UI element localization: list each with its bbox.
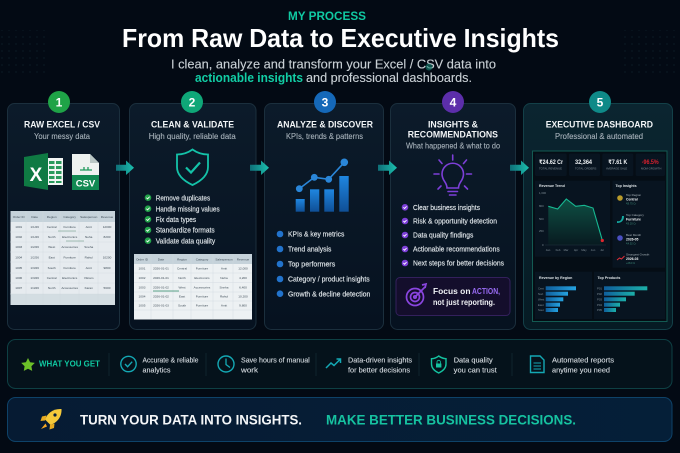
clean data table: North xyxy=(178,276,186,280)
benefit: data-driven xyxy=(326,355,412,375)
benefit: automated reports: anytime you need xyxy=(552,366,610,375)
raw data table: Order ID xyxy=(13,215,25,219)
raw data table: Central xyxy=(47,225,57,229)
badge 4: 4 xyxy=(450,96,457,110)
top insights: ₹8.75 Cr xyxy=(626,202,636,206)
raw data table: 1002 xyxy=(15,235,22,239)
clean data table: 2026-01-01 xyxy=(153,266,169,270)
arrow 1 to 2 xyxy=(116,160,134,175)
raw data table: 1/3/26 xyxy=(30,266,39,270)
raw data table: 1/3/26 xyxy=(30,276,39,280)
raw data table: Neha xyxy=(85,235,93,239)
top insights: ₹4.52 Cr xyxy=(626,242,636,246)
raw data table: 1/1/26 xyxy=(30,225,39,229)
clean data table: 1004 xyxy=(139,294,146,298)
checklist: recommendations: Clear business insights xyxy=(413,203,480,212)
subheading: kpis: KPIs, trends & patterns xyxy=(286,132,363,141)
badge 1 xyxy=(48,91,70,113)
line chart: revenue trend: Jul xyxy=(600,248,604,252)
raw data table: Furniture xyxy=(64,256,76,260)
badge 2 xyxy=(181,91,203,113)
subheading: messy data: Your messy data xyxy=(34,132,90,141)
raw data table: Electronics xyxy=(62,235,78,239)
raw data table: 1/1/26 xyxy=(30,235,39,239)
raw data table: 1/2/26 xyxy=(30,245,39,249)
panel 2: clean & validate xyxy=(130,104,256,330)
kpi cards: TOTAL REVENUE xyxy=(539,166,562,170)
raw data table: 1005 xyxy=(15,266,22,270)
top insights: ₹9.20 Cr xyxy=(626,222,636,226)
checklist: recommendations: Actionable recommendations xyxy=(413,245,500,254)
subtitle: and professional dashboards. xyxy=(306,70,472,85)
raw data table: Amit xyxy=(86,266,92,270)
checklist: cleaning steps: Remove duplicates xyxy=(156,193,210,202)
arrow 4 to 5 xyxy=(510,160,529,175)
benefit: save hours xyxy=(218,355,310,375)
list: analysis outputs: Growth & decline detection xyxy=(288,289,370,298)
bar chart: revenue by region: East xyxy=(538,303,544,307)
checklist: cleaning steps xyxy=(145,193,220,245)
icon: star xyxy=(21,358,35,371)
bar chart: top products: P03 xyxy=(597,298,602,302)
benefit: automated reports xyxy=(530,355,614,375)
line chart: revenue trend: Apr xyxy=(574,248,578,252)
arrow 2 to 3 xyxy=(250,160,269,175)
subtitle xyxy=(171,56,496,85)
list: analysis outputs: Top performers xyxy=(288,260,335,269)
line chart: revenue trend: Feb xyxy=(556,248,561,252)
benefit: save hours: Save hours of manual xyxy=(241,355,310,364)
eyebrow: my process: MY PROCESS xyxy=(288,11,366,23)
heading: insights xyxy=(408,119,498,140)
raw data table: 1003 xyxy=(15,245,22,249)
raw data table: Sneha xyxy=(84,245,93,249)
line chart: revenue trend: May xyxy=(581,248,587,252)
badge 1: 1 xyxy=(56,96,63,110)
clean data table: 6,400 xyxy=(239,286,247,290)
checklist: recommendations: Data quality findings xyxy=(413,231,473,240)
clean data table: 2026-01-03 xyxy=(153,304,169,308)
bar chart: revenue by region xyxy=(535,272,592,319)
top insights: 2026-03 xyxy=(626,257,639,261)
benefit: data-driven: for better decisions xyxy=(348,366,410,375)
raw data table: Salesperson xyxy=(80,215,98,219)
clean data table: Furniture xyxy=(196,266,208,270)
raw data table: 1/4/26 xyxy=(30,286,39,290)
title: From Raw Data to Executive Insights xyxy=(122,23,559,53)
heading: clean: CLEAN & VALIDATE xyxy=(151,120,234,130)
clean data table: Rahul xyxy=(220,294,228,298)
header xyxy=(122,11,559,85)
icon: target xyxy=(406,284,426,306)
benefit: data-driven: Data-driven insights xyxy=(348,355,412,364)
badge 2: 2 xyxy=(189,96,196,110)
badge 5: 5 xyxy=(597,96,604,110)
bar chart: revenue by region: Sout xyxy=(538,308,544,312)
kpi cards xyxy=(535,154,665,176)
callout text: ACTION, xyxy=(472,286,500,296)
heading: analyze: ANALYZE & DISCOVER xyxy=(277,120,373,130)
clean data table: 2026-01-02 xyxy=(153,294,169,298)
raw data table: East xyxy=(49,256,55,260)
panel 3: analyze & discover xyxy=(264,104,384,330)
badge 5 xyxy=(589,91,611,113)
raw data table: Accessories xyxy=(61,286,78,290)
bar chart: top products: P04 xyxy=(597,303,602,307)
callout text: Focus on xyxy=(433,286,470,296)
panel 1: raw excel / csv xyxy=(8,104,120,330)
kpi cards: TOTAL ORDERS xyxy=(575,166,597,170)
arrow 3 to 4 xyxy=(378,160,397,175)
benefit: data quality xyxy=(432,355,497,375)
line chart: revenue trend: 500 xyxy=(539,217,544,221)
raw data table: 8200 xyxy=(104,235,111,239)
line chart: revenue trend: Jun xyxy=(591,248,596,252)
callout text xyxy=(433,286,500,307)
top insights: Top Category xyxy=(626,213,644,217)
kpi cards: ₹24.62 Cr xyxy=(539,159,564,166)
clean data table: South xyxy=(178,304,186,308)
subtitle: actionable insights xyxy=(195,70,303,85)
clean data table xyxy=(134,254,252,320)
icon: csv file xyxy=(72,154,99,190)
raw data table xyxy=(10,211,115,305)
top insights: 2026-05 xyxy=(626,238,639,242)
raw data table: 5600 xyxy=(104,286,111,290)
callout text: not just reporting. xyxy=(433,297,495,307)
dashboard mockup xyxy=(532,151,667,322)
clean data table: 1002 xyxy=(139,276,146,280)
banner text: TURN YOUR DATA INTO INSIGHTS. xyxy=(80,411,302,427)
clean data table: Furniture xyxy=(196,294,208,298)
heading: raw excel: RAW EXCEL / CSV xyxy=(24,120,101,130)
panel 4: insights & recommendations xyxy=(390,104,516,330)
clean data table: East xyxy=(179,294,185,298)
raw data table: 1/2/26 xyxy=(30,256,39,260)
chart: bars and trend line xyxy=(296,158,349,212)
heading: insights: INSIGHTS & xyxy=(428,119,478,130)
benefit: data quality: Data quality xyxy=(454,355,493,364)
raw data table: Accessories xyxy=(61,245,78,249)
banner: call to action: MAKE BETTER BUSINESS DECISIONS. xyxy=(326,411,576,427)
bar chart: revenue by region: Cent xyxy=(538,286,544,290)
raw data table: 12000 xyxy=(103,225,112,229)
subheading: what happened: What happened & what to do xyxy=(406,142,500,151)
bar chart: revenue by region: Revenue by Region xyxy=(539,276,572,280)
clean data table: Neha xyxy=(220,276,228,280)
subheading: quality: High quality, reliable data xyxy=(149,132,236,141)
raw data table: West xyxy=(48,245,55,249)
clean data table: 10,200 xyxy=(238,294,248,298)
clean data table: Amit xyxy=(221,266,227,270)
raw data table: Karan xyxy=(85,286,93,290)
raw data table: Furniture xyxy=(64,225,76,229)
checklist: cleaning steps: Fix data types xyxy=(156,215,196,224)
raw data table: 9800 xyxy=(104,266,111,270)
clean data table: 2026-01-01 xyxy=(153,276,169,280)
icon: excel logo: X xyxy=(30,165,43,186)
line chart: revenue trend xyxy=(535,181,610,257)
icon: excel logo xyxy=(24,153,63,190)
kpi cards: 32,364 xyxy=(575,160,593,166)
icon: csv file: CSV xyxy=(76,178,96,190)
raw data table: Category xyxy=(63,215,76,219)
subtitle: I clean, analyze and transform your Excel / CSV data into xyxy=(171,56,496,72)
raw data table: Date xyxy=(31,215,38,219)
bar chart: top products xyxy=(594,272,665,319)
clean data table: 1003 xyxy=(139,286,146,290)
clean data table: 2026-01-02 xyxy=(153,286,169,290)
icon: rocket xyxy=(40,409,62,430)
clean data table: Electronics xyxy=(194,276,210,280)
checklist: cleaning steps: Handle missing values xyxy=(156,204,220,213)
line chart: revenue trend: 250 xyxy=(539,229,544,233)
top insights: Best Month xyxy=(626,233,642,237)
label: what you get: WHAT YOU GET xyxy=(39,359,101,369)
clean data table: Accessories xyxy=(194,286,211,290)
raw data table: 1007 xyxy=(15,286,22,290)
raw data table: North xyxy=(48,235,56,239)
benefit: accurate analytics: Accurate & reliable xyxy=(142,355,198,364)
bar chart: revenue by region: Nort xyxy=(538,292,544,296)
raw data table: 1006 xyxy=(15,276,22,280)
top insights: Top Region xyxy=(626,193,642,197)
line chart: revenue trend: 800 xyxy=(539,204,544,208)
list: analysis outputs: Category / product insights xyxy=(288,275,370,284)
list: analysis outputs: Trend analysis xyxy=(288,245,331,254)
raw data table: Furniture xyxy=(64,266,76,270)
heading: insights: RECOMMENDATIONS xyxy=(408,130,498,140)
benefit: save hours: work xyxy=(240,366,258,375)
raw data table: Rahul xyxy=(85,256,93,260)
bar chart: top products: Top Products xyxy=(598,276,620,280)
icon: shield check xyxy=(177,150,208,185)
raw data table: Vikram xyxy=(84,276,94,280)
raw data table: Central xyxy=(47,276,57,280)
raw data table: North xyxy=(48,286,56,290)
badge 3 xyxy=(314,91,336,113)
clean data table: 1001 xyxy=(139,266,146,270)
raw data table: Electronics xyxy=(62,276,78,280)
badge 3: 3 xyxy=(322,96,329,110)
bar chart: top products: P05 xyxy=(597,308,602,312)
benefit: accurate analytics xyxy=(121,355,198,375)
badge 4 xyxy=(442,91,464,113)
list: analysis outputs: KPIs & key metrics xyxy=(288,230,344,239)
checklist: cleaning steps: Validate data quality xyxy=(156,236,215,245)
top insights: Top Insights xyxy=(616,184,637,188)
line chart: revenue trend: 1,000 xyxy=(539,191,546,195)
raw data table: 1004 xyxy=(15,256,22,260)
benefit: accurate analytics: analytics xyxy=(142,366,171,375)
line chart: revenue trend: Mar xyxy=(564,248,568,252)
checklist: recommendations xyxy=(402,203,504,268)
kpi cards: ₹7.61 K xyxy=(608,159,628,166)
top insights: Strongest Growth xyxy=(626,252,650,256)
raw data table: 1001 xyxy=(15,225,22,229)
top insights: Central xyxy=(626,198,638,202)
clean data table: Order ID xyxy=(136,258,149,262)
raw data table: Amit xyxy=(86,225,92,229)
bar chart: revenue by region: West xyxy=(538,298,545,302)
bar chart: top products: P01 xyxy=(597,286,602,290)
list: analysis outputs xyxy=(277,230,370,298)
raw data table: 10200 xyxy=(103,256,112,260)
line chart: revenue trend: Revenue Trend xyxy=(539,184,565,188)
clean data table: Category xyxy=(196,258,209,262)
line chart: revenue trend: 0 xyxy=(542,243,544,247)
clean data table: Date xyxy=(158,258,165,262)
top insights xyxy=(612,181,665,268)
top insights: +28.1% xyxy=(626,261,636,265)
icon: light bulb xyxy=(434,155,472,195)
line chart: revenue trend: Jan xyxy=(546,248,551,252)
raw data table: South xyxy=(48,266,56,270)
clean data table: 4,200 xyxy=(239,276,247,280)
clean data table: Revenue xyxy=(237,258,249,262)
clean data table: Salesperson xyxy=(215,258,233,262)
checklist: cleaning steps: Standardize formats xyxy=(156,226,215,235)
raw data table: Region xyxy=(47,215,57,219)
clean data table: Central xyxy=(177,266,187,270)
clean data table: Furniture xyxy=(196,304,208,308)
checklist: recommendations: Next steps for better decisions xyxy=(413,259,504,268)
banner: call to action xyxy=(8,398,672,442)
bar chart: top products: P02 xyxy=(597,292,602,296)
panel 5: executive dashboard xyxy=(524,104,672,330)
clean data table: Amit xyxy=(221,304,227,308)
clean data table: West xyxy=(178,286,186,290)
panel: what you get xyxy=(8,340,672,388)
subheading: professional: Professional & automated xyxy=(555,132,643,141)
clean data table: 1005 xyxy=(139,304,146,308)
raw data table: Revenue xyxy=(101,215,113,219)
callout: focus on action xyxy=(396,278,510,316)
clean data table: 9,800 xyxy=(239,304,247,308)
kpi cards: AVERAGE SALE xyxy=(606,166,627,170)
top insights: Furniture xyxy=(626,218,641,222)
heading: executive: EXECUTIVE DASHBOARD xyxy=(546,120,653,130)
benefit: automated reports: Automated reports xyxy=(552,355,614,364)
clean data table: Sneha xyxy=(220,286,229,290)
checklist: recommendations: Risk & opportunity detection xyxy=(413,217,497,226)
kpi cards: -96.5% xyxy=(642,160,659,166)
clean data table: 12,000 xyxy=(238,266,248,270)
clean data table: Region xyxy=(177,258,187,262)
kpi cards: MOM GROWTH xyxy=(641,166,661,170)
benefit: data quality: you can trust xyxy=(454,366,497,375)
